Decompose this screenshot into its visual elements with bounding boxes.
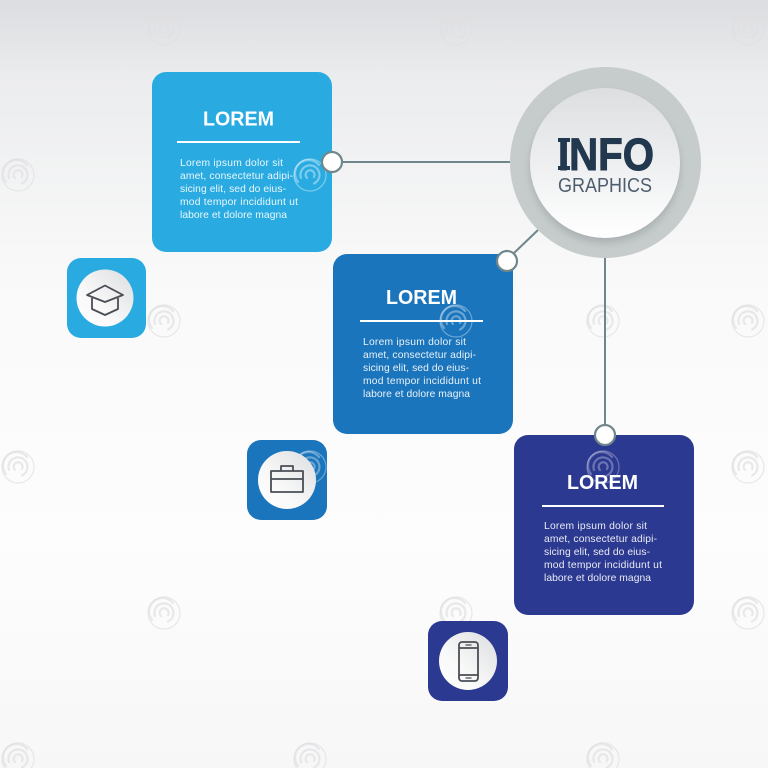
- card 2 body text: labore et dolore magna: [363, 389, 470, 400]
- panel: card 3: [514, 435, 694, 615]
- connector lines: [343, 162, 605, 426]
- card 1 body text: mod tempor incididunt ut: [180, 197, 298, 208]
- card 3 body text: mod tempor incididunt ut: [544, 560, 662, 571]
- card 3 body text: labore et dolore magna: [544, 573, 651, 584]
- central badge: [510, 67, 701, 258]
- card 1 body text: [180, 158, 298, 221]
- card 2 body text: [363, 337, 481, 400]
- icon tile: graduation cap: [67, 258, 146, 338]
- panel: card 1: [152, 72, 332, 252]
- node: card 2 connector: [497, 251, 517, 271]
- card 3 body text: Lorem ipsum dolor sit: [544, 521, 647, 532]
- card 1 body text: Lorem ipsum dolor sit: [180, 158, 283, 169]
- node: card 1 connector: [322, 152, 342, 172]
- panel: card 2: [333, 254, 513, 434]
- subtitle: GRAPHICS: GRAPHICS: [558, 174, 652, 197]
- card 2 body text: amet, consectetur adipi-: [363, 350, 476, 361]
- card 2 body text: Lorem ipsum dolor sit: [363, 337, 466, 348]
- card 1 body text: labore et dolore magna: [180, 210, 287, 221]
- card 2 body text: sicing elit, sed do eius-: [363, 363, 469, 374]
- card 3 body text: amet, consectetur adipi-: [544, 534, 657, 545]
- card 1 body text: amet, consectetur adipi-: [180, 171, 293, 182]
- title: INFO: INFO: [558, 129, 654, 180]
- icon tile: smartphone: [428, 621, 508, 701]
- card 3 body text: [544, 521, 662, 584]
- card 1 heading: LOREM: [203, 108, 274, 130]
- card 3 heading: LOREM: [567, 471, 638, 494]
- card 3 body text: sicing elit, sed do eius-: [544, 547, 650, 558]
- icon tile: briefcase: [247, 440, 327, 520]
- node: card 3 connector: [595, 425, 615, 445]
- card 1 body text: sicing elit, sed do eius-: [180, 184, 286, 195]
- card 2 body text: mod tempor incididunt ut: [363, 376, 481, 387]
- card 2 heading: LOREM: [386, 286, 457, 309]
